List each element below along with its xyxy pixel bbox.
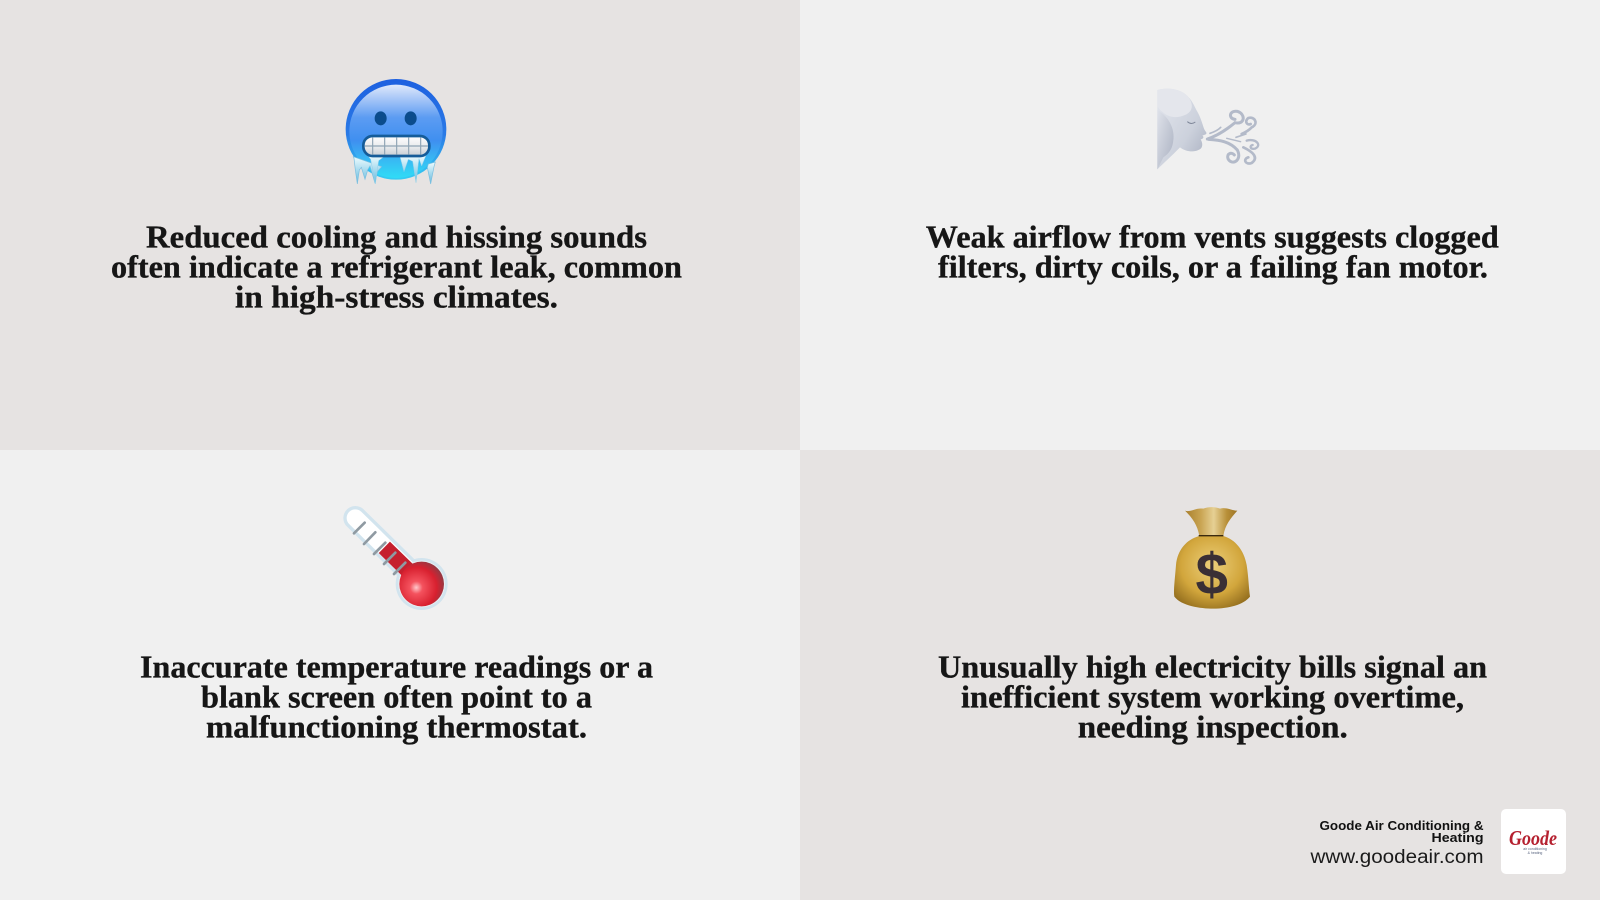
text: faulty thermostat: Inaccurate temperature readings or a	[140, 648, 653, 684]
icon: cold face emoji	[346, 79, 446, 184]
text: weak airflow	[926, 218, 1499, 284]
footer: company name and website: Goode Air Conditioning &	[1320, 818, 1484, 833]
panel: weak airflow	[800, 0, 1600, 450]
panel: refrigerant leak	[0, 0, 800, 450]
text: faulty thermostat: blank screen often point to a	[201, 678, 592, 714]
text: faulty thermostat: malfunctioning thermostat.	[206, 708, 587, 744]
footer: company name and website	[1309, 818, 1484, 868]
text: high electricity bills	[938, 648, 1487, 744]
logo badge: & heating	[1528, 851, 1542, 855]
text: weak airflow: Weak airflow from vents suggests clogged	[926, 218, 1499, 254]
panel: high electricity bills	[800, 450, 1600, 900]
footer: company name and website: www.goodeair.com	[1309, 847, 1484, 868]
logo badge: air conditioning	[1523, 847, 1547, 851]
text: refrigerant leak: in high-stress climates.	[235, 278, 558, 314]
text: weak airflow: filters, dirty coils, or a failing fan motor.	[938, 248, 1488, 284]
icon: thermometer emoji	[354, 518, 448, 610]
text: refrigerant leak: often indicate a refrigerant leak, common	[111, 248, 682, 284]
icon: money bag emoji	[1174, 507, 1250, 609]
panel: faulty thermostat	[0, 450, 800, 900]
logo badge	[1501, 809, 1566, 874]
text: refrigerant leak	[111, 218, 682, 314]
text: high electricity bills: needing inspection.	[1078, 708, 1348, 744]
logo badge: Goode	[1509, 826, 1557, 850]
text: high electricity bills: inefficient system working overtime,	[961, 678, 1464, 714]
icon: wind face emoji	[1157, 89, 1258, 169]
footer: company name and website: Heating	[1432, 830, 1484, 845]
text: refrigerant leak: Reduced cooling and hissing sounds	[146, 218, 647, 254]
icon: money bag emoji: $	[1195, 542, 1228, 607]
text: faulty thermostat	[140, 648, 653, 744]
text: high electricity bills: Unusually high electricity bills signal an	[938, 648, 1487, 684]
